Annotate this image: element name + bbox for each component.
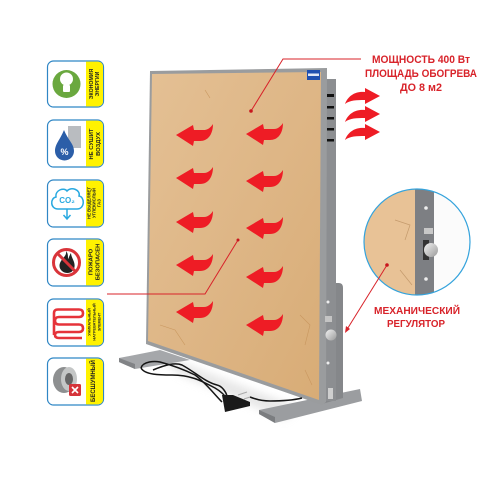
badge: energy saving: ЭКОНОМИЯ: [89, 69, 95, 99]
badge: heating element: НАГРЕВАТЕЛЬНЫЙ: [92, 303, 96, 341]
badge: no CO2: НЕ ВЫДЕЛЯЕТ: [86, 187, 92, 219]
callout: power: МОЩНОСТЬ 400 Вт: [372, 54, 471, 66]
badge: heating element: [48, 299, 104, 346]
heater panel: [146, 68, 327, 405]
icon: CO2 cloud: CO₂: [59, 196, 75, 205]
floor shadow: [150, 350, 300, 420]
heater side with vents: [326, 79, 336, 401]
icon: bulb: [52, 70, 80, 98]
callout: mechanical regulator: РЕГУЛЯТОР: [387, 318, 445, 330]
badge: fire safe: БЕЗОПАСЕН: [96, 244, 102, 280]
red arrows on panel: [176, 123, 283, 336]
badge: fire safe: [48, 239, 104, 286]
badge: does not dry air: ВОЗДУХ: [96, 132, 102, 156]
icon: speaker muted: [53, 367, 81, 396]
stand upright plate: [322, 283, 343, 404]
icon: heating coil: [54, 310, 83, 338]
badge: fire safe: ПОЖАРО: [88, 248, 94, 275]
icon: drop with percent: %: [60, 147, 69, 157]
badge: no CO2: ГАЗ: [96, 199, 102, 207]
regulator on side: [325, 300, 336, 399]
red heat arrows right: [345, 88, 380, 140]
badge: energy saving: [48, 61, 104, 107]
inset: regulator close-up: [364, 188, 472, 298]
badge: heating element: УНИКАЛЬНЫЙ: [88, 308, 92, 336]
callout: power: ДО 8 м2: [400, 82, 442, 94]
badge: energy saving: ЭНЕРГИИ: [95, 71, 101, 96]
badge: silent: [48, 358, 104, 405]
callout: mechanical regulator: МЕХАНИЧЕСКИЙ: [374, 304, 460, 317]
left stand foot: [119, 350, 190, 369]
badge: no CO2: УГЛЕКИСЛЫЙ: [92, 188, 96, 218]
badge: does not dry air: [48, 120, 104, 167]
badge: no CO2: [48, 180, 104, 227]
right stand foot: [259, 389, 362, 423]
callout: power: [249, 54, 477, 113]
badge: silent: БЕСШУМНЫЙ: [89, 360, 97, 402]
brand label: [307, 70, 320, 80]
icon: no fire: [54, 250, 80, 276]
callout: heating element line: [107, 238, 240, 294]
badge: does not dry air: НЕ СУШИТ: [89, 128, 95, 159]
power cord: [141, 362, 302, 412]
callout: power: ПЛОЩАДЬ ОБОГРЕВА: [365, 68, 477, 80]
badge: heating element: ЭЛЕМЕНТ: [98, 312, 102, 331]
callout: mechanical regulator: [345, 263, 460, 333]
